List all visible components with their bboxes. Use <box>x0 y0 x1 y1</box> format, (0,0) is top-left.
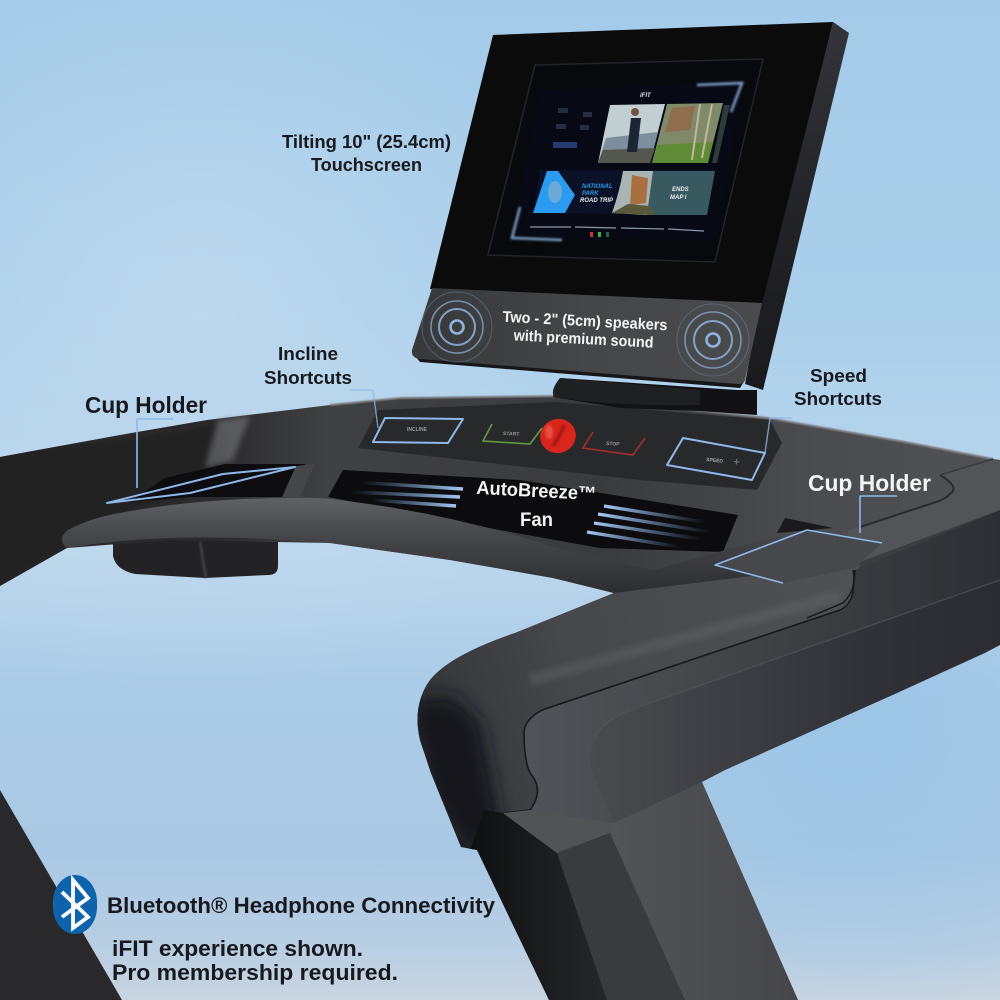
post black strip <box>470 810 607 1000</box>
fan label: AutoBreeze™ <box>476 478 597 505</box>
bluetooth label: Bluetooth® Headphone Connectivity <box>107 893 495 918</box>
incline shortcuts label <box>264 343 352 388</box>
fan streaks right <box>587 506 710 547</box>
screen glass border <box>488 59 763 262</box>
incline shortcuts label: Incline <box>278 343 338 364</box>
speakers label: Two - 2" (5cm) speakers <box>502 309 668 334</box>
left cup holder outline and leader <box>107 419 295 503</box>
fan label: Fan <box>520 510 553 531</box>
monitor front bezel <box>430 22 833 304</box>
speed shortcuts label: Speed <box>810 365 867 386</box>
monitor <box>430 22 849 390</box>
speed shortcuts label: Shortcuts <box>794 388 882 409</box>
banner: PARK <box>582 191 599 197</box>
touchscreen label: Tilting 10" (25.4cm) <box>282 131 451 152</box>
touchscreen label <box>282 131 451 175</box>
speed label: SPEED <box>706 457 724 465</box>
plus and minus marks: + <box>733 456 740 469</box>
upright post <box>470 782 798 1000</box>
disclaimer: iFIT experience shown. <box>112 936 363 961</box>
banner: ROAD TRIP <box>580 198 614 204</box>
right cup holder label: Cup Holder <box>808 470 931 496</box>
touchscreen label: Touchscreen <box>311 154 422 175</box>
right arm top face and rim <box>715 459 1000 618</box>
left handlebar underside block <box>113 540 278 578</box>
banner: MAP I <box>670 195 687 201</box>
banner right text: ENDS <box>672 187 689 193</box>
left speaker rings <box>422 292 492 362</box>
sidebar tiles <box>553 108 592 148</box>
fan label <box>476 478 597 531</box>
arm crease <box>595 580 1000 740</box>
start label: START <box>503 431 519 438</box>
disclaimer: Pro membership required. <box>112 960 398 985</box>
screen frame glow <box>512 83 742 240</box>
treadmill upright lower left <box>0 790 122 1000</box>
speakers label <box>501 309 668 352</box>
blue callout outlines <box>107 390 897 583</box>
post right panel <box>610 782 798 1000</box>
speed shortcut outline and leader <box>667 418 792 480</box>
post collar <box>503 810 614 853</box>
incline shortcuts label: Shortcuts <box>264 367 352 388</box>
left cup holder well <box>130 464 305 502</box>
workout photo two <box>652 103 723 163</box>
disclaimer <box>112 936 398 985</box>
front ridge of console <box>62 498 850 598</box>
light top lip <box>330 396 993 459</box>
fan streaks left <box>352 482 463 506</box>
right cup holder outline and leader <box>715 496 897 583</box>
arm top band <box>400 565 860 850</box>
banner <box>533 170 715 215</box>
arm seam <box>503 570 855 813</box>
top band highlight <box>530 595 840 680</box>
status dots <box>590 232 609 237</box>
arm lower panel <box>590 580 1000 823</box>
screen display <box>512 83 742 240</box>
speaker bar <box>412 288 762 388</box>
incline shortcut outline and leader <box>350 390 463 443</box>
monitor stand <box>553 378 757 415</box>
post middle panel <box>557 833 685 1000</box>
highlight left of holder <box>205 416 250 468</box>
autobreeze fan grille <box>328 470 738 552</box>
arm corner shadow <box>405 695 500 865</box>
stop label: STOP <box>606 441 620 448</box>
stop button outline <box>583 432 645 455</box>
workout photo one <box>598 104 665 163</box>
incline label: INCLINE <box>407 427 428 433</box>
screen header: iFIT <box>640 93 652 99</box>
red safety key <box>535 414 581 458</box>
cup holder cover <box>715 530 882 583</box>
console body <box>0 396 1000 600</box>
right speaker rings <box>677 304 749 376</box>
speakers label: with premium sound <box>512 327 654 352</box>
arm middle band <box>524 510 1000 823</box>
icon: bluetooth <box>53 875 97 934</box>
side photo sliver <box>712 105 730 163</box>
monitor side edge <box>745 22 849 390</box>
button panel recess <box>358 402 782 490</box>
start button outline <box>483 424 542 444</box>
dark left arm shadow <box>0 426 226 586</box>
banner title: NATIONAL <box>582 184 613 190</box>
cover seam <box>807 570 854 618</box>
progress bars <box>530 227 704 231</box>
right arm <box>400 505 1000 1000</box>
arm silhouette <box>418 505 1000 1000</box>
speed shortcuts label <box>794 365 882 409</box>
right holder well <box>777 518 833 533</box>
left cup holder label: Cup Holder <box>85 392 207 418</box>
